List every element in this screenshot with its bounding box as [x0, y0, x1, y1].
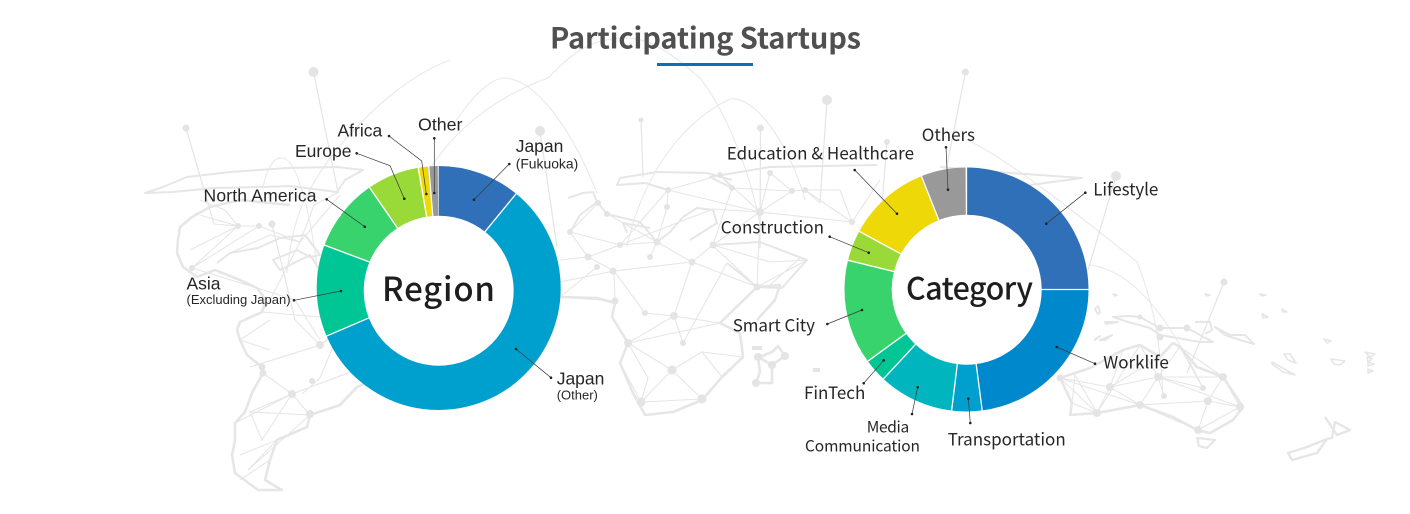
donut segments: region: [378, 227, 500, 349]
callout: Africa: [338, 120, 428, 195]
callout: Japan (Fukuoka): (Fukuoka): [516, 155, 578, 171]
callout: Worklife: Worklife: [1103, 348, 1169, 373]
callout: Lifestyle: Lifestyle: [1093, 176, 1158, 201]
callout: Transportation: Transportation: [948, 426, 1066, 451]
callout: Japan (Fukuoka): [473, 136, 578, 201]
callout: Construction: Construction: [721, 213, 824, 238]
callout: Asia (Excluding Japan): (Excluding Japan): [186, 292, 291, 307]
callout: Japan (Fukuoka): Japan: [516, 136, 563, 156]
callout: North America: North America: [204, 186, 317, 206]
callout: Africa: Africa: [338, 120, 382, 140]
callout: Media Communication: [805, 386, 920, 457]
callout: Smart City: [733, 309, 863, 337]
callout: Japan (Other): Japan: [557, 368, 604, 388]
callout: Education & Healthcare: Education & Healthcare: [727, 139, 914, 164]
callout: Smart City: Smart City: [733, 312, 815, 337]
callout: FinTech: [804, 359, 885, 404]
callout: Japan (Other): [515, 348, 604, 402]
callout: Others: Others: [922, 121, 975, 146]
callout: Worklife: [1055, 346, 1169, 373]
panel: category donut chart: [721, 121, 1169, 457]
callout: Japan (Other): (Other): [557, 387, 598, 402]
callout: Media Communication: Communication: [805, 435, 920, 457]
title: Participating Startups: [550, 15, 861, 57]
chart centre label: Region: Region: [382, 263, 495, 311]
panel: region donut chart: [186, 114, 604, 402]
background: world network map: [145, 38, 1375, 490]
callout: North America: [204, 186, 366, 228]
callout: Other: [418, 114, 463, 194]
donut segments: category: [906, 228, 1028, 350]
callout: Europe: Europe: [295, 141, 351, 161]
callout: Asia (Excluding Japan): [186, 273, 342, 307]
callout: Construction: [721, 213, 870, 254]
callout: Transportation: [948, 397, 1066, 451]
callout: Media Communication: Media: [867, 416, 909, 438]
chart centre label: Category: Category: [906, 264, 1033, 308]
callout: Others: [922, 121, 975, 191]
callout: FinTech: FinTech: [804, 379, 865, 404]
title underline: [657, 63, 753, 66]
callout: Education & Healthcare: [727, 139, 914, 215]
callout: Europe: [295, 141, 406, 200]
callout: Asia (Excluding Japan): Asia: [186, 273, 221, 293]
callout: Lifestyle: [1045, 176, 1158, 225]
callout: Other: Other: [418, 114, 463, 134]
